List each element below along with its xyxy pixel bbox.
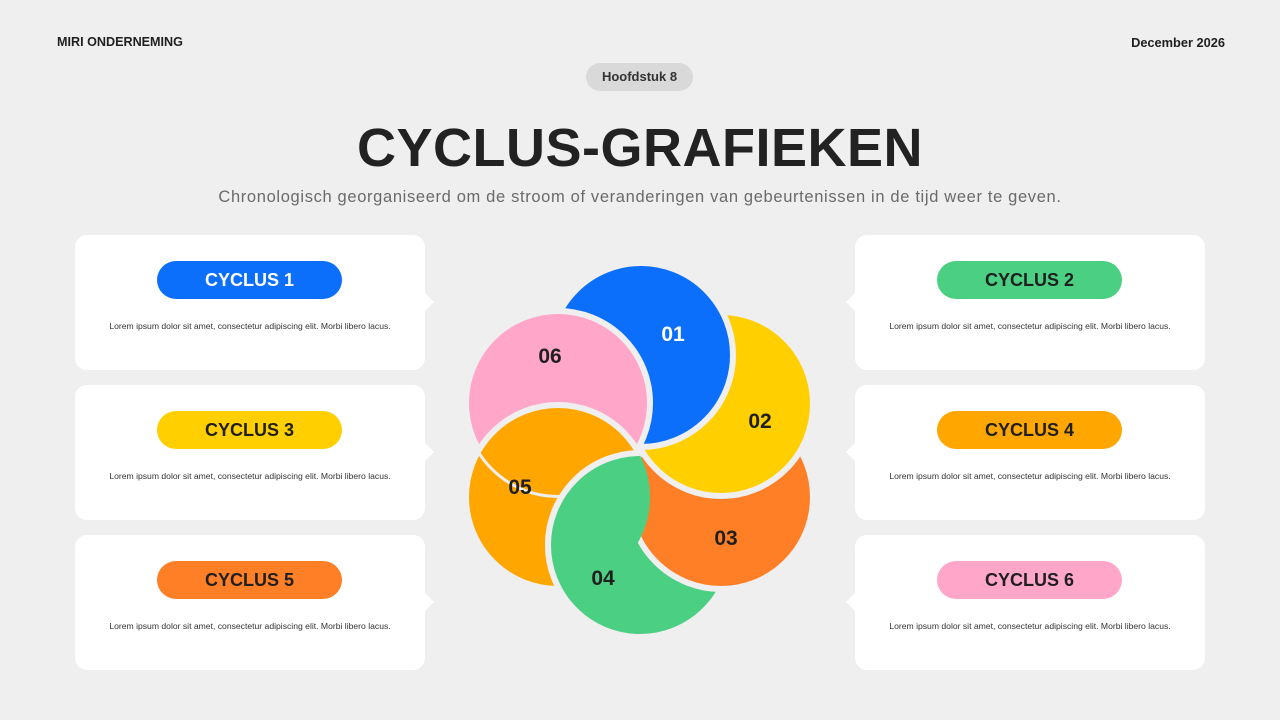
segment labels: 02 bbox=[748, 410, 772, 433]
segment labels: 01 bbox=[661, 323, 685, 346]
pill: cyclus 6 bbox=[937, 561, 1122, 599]
pill: cyclus 3: CYCLUS 3 bbox=[205, 420, 294, 440]
title: CYCLUS-GRAFIEKEN bbox=[357, 118, 923, 178]
panel: cyclus 4 bbox=[855, 385, 1205, 520]
pill: cyclus 5 bbox=[157, 561, 342, 599]
panel: cyclus 1 bbox=[75, 235, 425, 370]
text: cyclus 4: Lorem ipsum dolor sit amet, consectetur adipiscing elit. Morbi libero lacus. bbox=[889, 471, 1171, 481]
pill: cyclus 5: CYCLUS 5 bbox=[205, 570, 294, 590]
chapter badge bbox=[586, 63, 693, 91]
panel: cyclus 5 bbox=[75, 535, 425, 670]
panel: cyclus 6 bbox=[855, 535, 1205, 670]
header right: December 2026 bbox=[1131, 35, 1225, 50]
segment 05 overlay bbox=[479, 402, 637, 495]
pill: cyclus 4: CYCLUS 4 bbox=[985, 420, 1074, 440]
pill: cyclus 2 bbox=[937, 261, 1122, 299]
text: cyclus 2: Lorem ipsum dolor sit amet, consectetur adipiscing elit. Morbi libero lacus. bbox=[889, 321, 1171, 331]
cycle diagram bbox=[469, 266, 810, 634]
panel: cyclus 2 bbox=[855, 235, 1205, 370]
segment 02 bbox=[629, 312, 813, 496]
segment labels: 03 bbox=[714, 527, 738, 550]
chapter badge: Hoofdstuk 8 bbox=[602, 69, 677, 84]
text: cyclus 1: Lorem ipsum dolor sit amet, consectetur adipiscing elit. Morbi libero lacus. bbox=[109, 321, 391, 331]
segment labels: 04 bbox=[591, 567, 615, 590]
pill: cyclus 2: CYCLUS 2 bbox=[985, 270, 1074, 290]
pill: cyclus 1 bbox=[157, 261, 342, 299]
pill: cyclus 6: CYCLUS 6 bbox=[985, 570, 1074, 590]
panel: cyclus 3 bbox=[75, 385, 425, 520]
segment labels: 06 bbox=[538, 345, 562, 368]
subtitle: Chronologisch georganiseerd om de stroom of veranderingen van gebeurtenissen in de tijd weer te geven. bbox=[218, 188, 1062, 206]
text: cyclus 5: Lorem ipsum dolor sit amet, consectetur adipiscing elit. Morbi libero lacus. bbox=[109, 621, 391, 631]
pill: cyclus 4 bbox=[937, 411, 1122, 449]
text: cyclus 3: Lorem ipsum dolor sit amet, consectetur adipiscing elit. Morbi libero lacus. bbox=[109, 471, 391, 481]
segment 06 bbox=[466, 311, 650, 495]
segment 04 bbox=[548, 453, 732, 637]
segment 05 bbox=[466, 405, 650, 589]
segment 04 overlay bbox=[545, 450, 650, 589]
segment labels bbox=[508, 323, 772, 590]
pill: cyclus 1: CYCLUS 1 bbox=[205, 270, 294, 290]
segment 01 bbox=[549, 263, 733, 447]
segment labels: 05 bbox=[508, 476, 532, 499]
text: cyclus 6: Lorem ipsum dolor sit amet, consectetur adipiscing elit. Morbi libero lacus. bbox=[889, 621, 1171, 631]
pill: cyclus 3 bbox=[157, 411, 342, 449]
segment 03 bbox=[629, 405, 813, 589]
header left: MIRI ONDERNEMING bbox=[57, 35, 183, 49]
